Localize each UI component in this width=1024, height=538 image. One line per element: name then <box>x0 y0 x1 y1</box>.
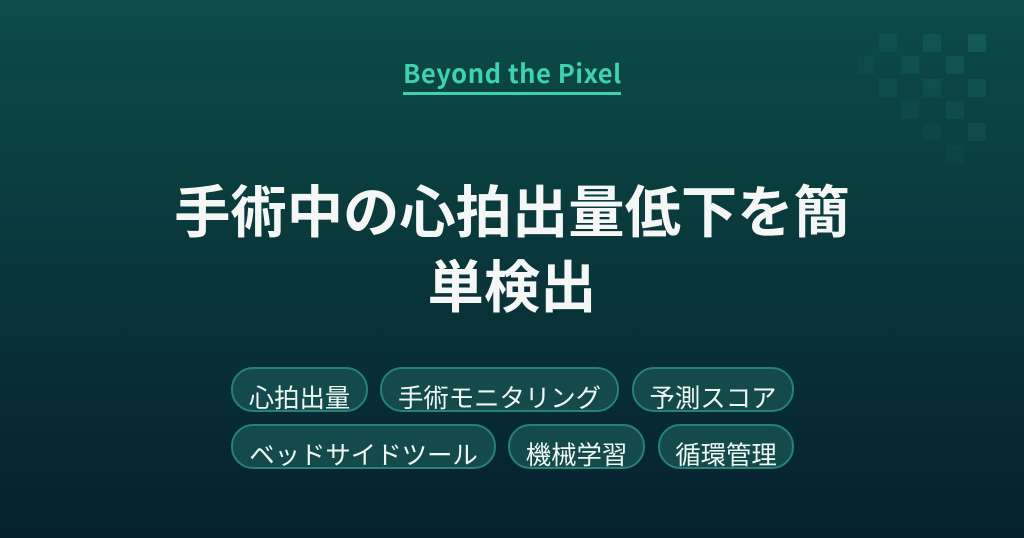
title: 単検出 <box>428 243 596 324</box>
tag: ベッドサイドツール: ベッドサイドツール <box>249 436 478 472</box>
title <box>174 168 850 324</box>
brand heading: Beyond the Pixel: Beyond the Pixel <box>403 54 622 91</box>
title: 手術中の心拍出量低下を簡 <box>174 168 850 249</box>
tag: 心拍出量 <box>231 367 368 412</box>
tag: 予測スコア <box>632 367 794 412</box>
decorative pixel grid <box>879 34 986 141</box>
tag: 循環管理 <box>658 424 794 469</box>
tag: 手術モニタリング: 手術モニタリング <box>398 379 601 415</box>
tag: 機械学習: 機械学習 <box>526 436 627 472</box>
tags <box>231 367 794 472</box>
tag: 手術モニタリング <box>380 367 619 412</box>
tag: 心拍出量: 心拍出量 <box>249 379 350 415</box>
tag: ベッドサイドツール <box>231 424 496 469</box>
tag: 機械学習 <box>508 424 645 469</box>
tag: 循環管理: 循環管理 <box>675 436 777 472</box>
tag: 予測スコア: 予測スコア <box>650 379 776 415</box>
